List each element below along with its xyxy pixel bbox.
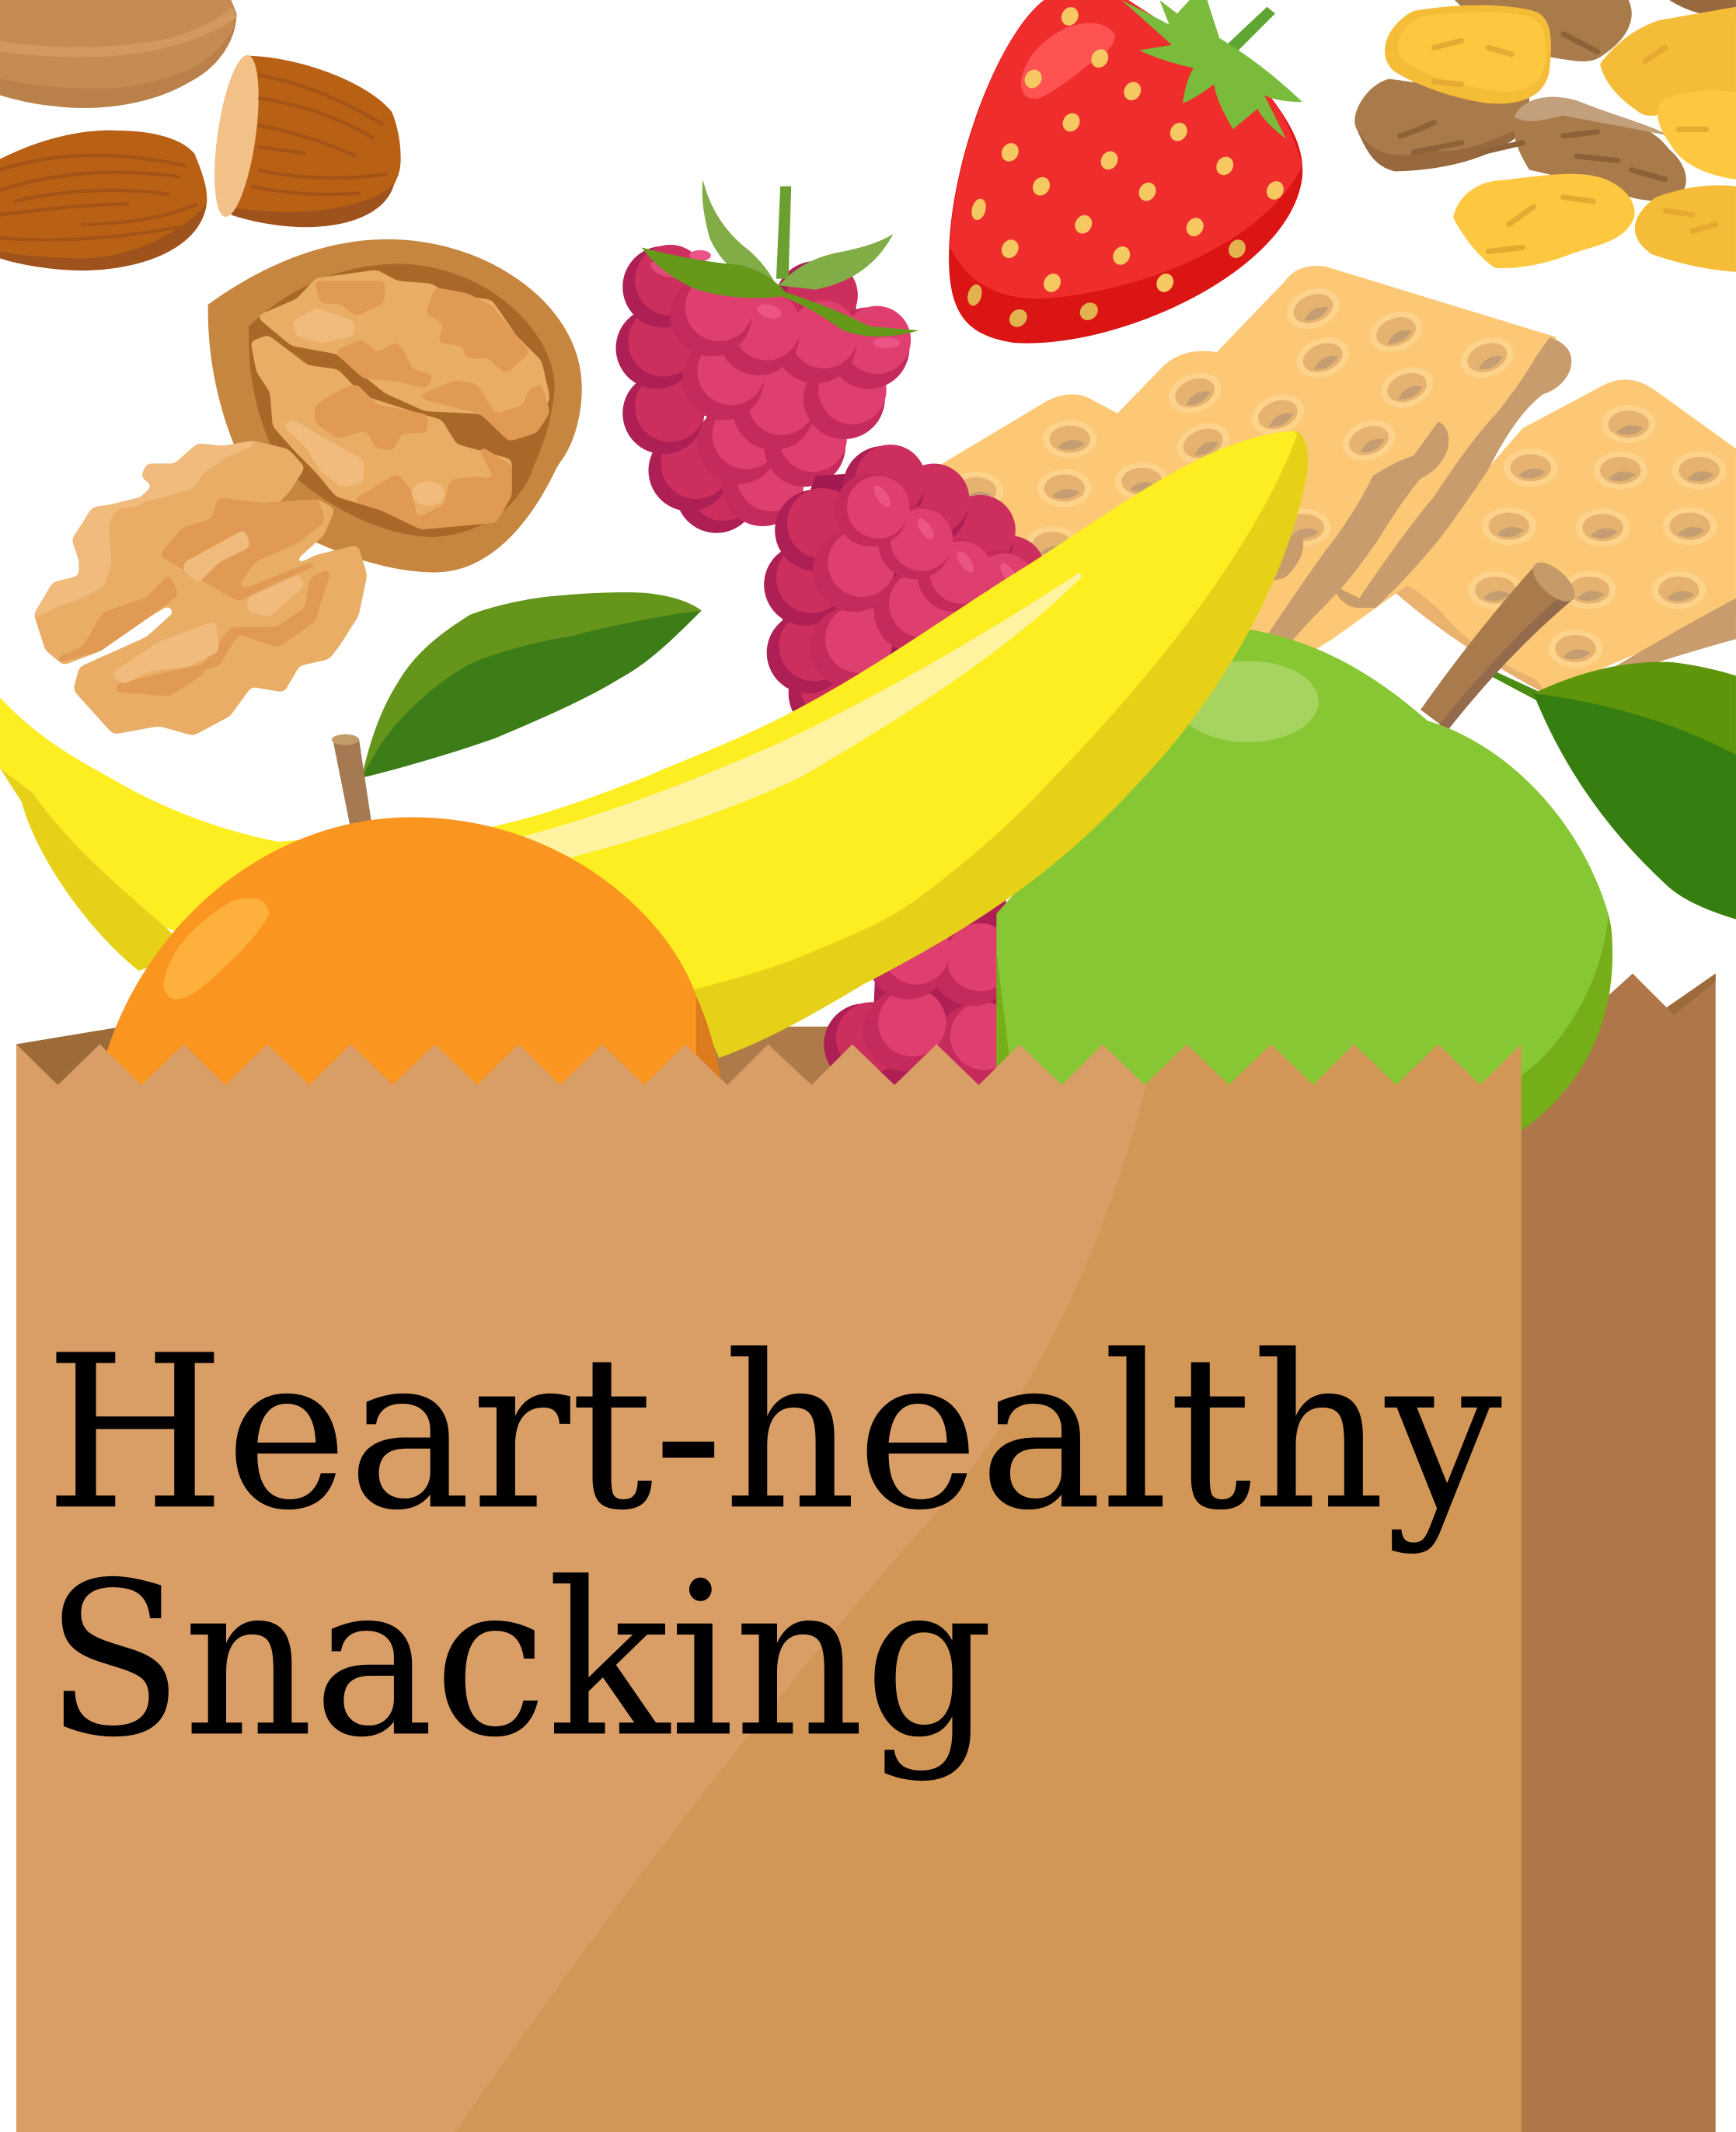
- strawberry calyx: [1121, 0, 1302, 138]
- strawberry: [949, 0, 1302, 344]
- orange body: [686, 993, 722, 1085]
- green apple with leaf and stem: [996, 556, 1736, 1131]
- banana dark underside: [686, 431, 1308, 1058]
- banana highlight: [524, 572, 1082, 860]
- orange highlight: [163, 898, 269, 1000]
- raisin wrinkles: [1400, 34, 1665, 180]
- walnut kernel: [37, 443, 364, 733]
- left leaf: [361, 592, 702, 778]
- cracker: stacked left: [936, 266, 1571, 707]
- sultana wrinkles: [1434, 40, 1716, 252]
- title: [45, 1310, 1502, 1785]
- raspberry leaves and stem: [642, 180, 919, 337]
- apple stem: [1421, 564, 1574, 730]
- orange with stem: [98, 735, 722, 1085]
- title: Snacking: [45, 1538, 994, 1785]
- almond cut: [207, 53, 401, 227]
- walnut half in shell: [208, 239, 582, 572]
- inside back wall of bag: [16, 1027, 1522, 1087]
- banana: [0, 431, 1308, 1058]
- walnut shell top left: [0, 0, 236, 108]
- apple body: [1509, 914, 1612, 1131]
- strawberry stem: [1219, 7, 1275, 61]
- apple right leaf: [1493, 670, 1543, 702]
- raisins: brown: [1455, 0, 1632, 61]
- cracker: right: [1389, 379, 1736, 696]
- banana body: [0, 431, 1297, 1034]
- bag shaded fold: [455, 1045, 1522, 2132]
- paper bag front: [16, 1045, 1522, 2132]
- title: Heart-healthy: [45, 1310, 1502, 1558]
- sultanas: yellow: [1385, 5, 1551, 103]
- dried fruit: raisins and sultanas: [1354, 0, 1736, 272]
- strawberry highlight: [1021, 23, 1115, 99]
- crackers: [936, 266, 1736, 707]
- orange stem: [333, 738, 372, 829]
- raspberry: upper: [615, 245, 911, 533]
- almond left: [0, 131, 207, 270]
- strawberry seeds: [965, 4, 1287, 330]
- raspberry: lower: [764, 445, 1045, 1085]
- side panel of paper bag: [1522, 974, 1716, 2132]
- apple highlight: [1177, 661, 1319, 742]
